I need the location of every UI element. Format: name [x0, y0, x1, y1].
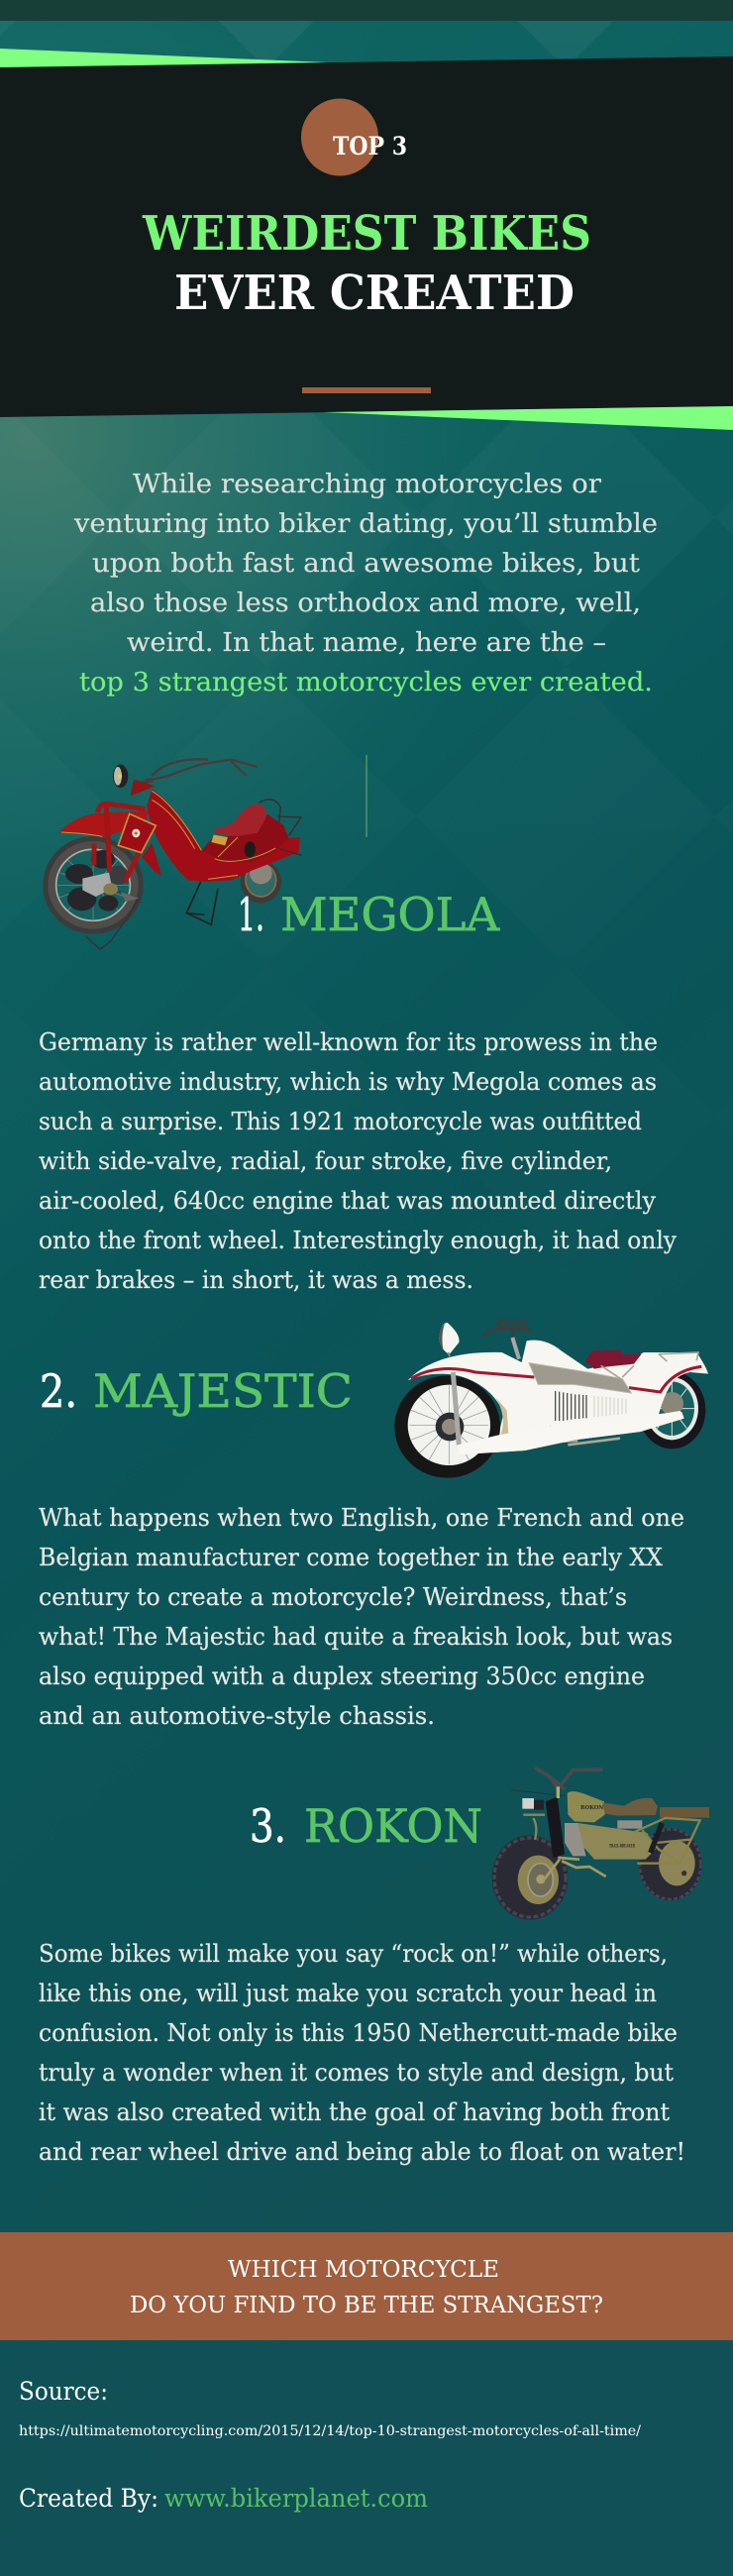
headlight: [113, 765, 128, 788]
source label: Source:: [19, 2377, 108, 2406]
text block: Rokon description: and rear wheel drive and being able to float on water!: [39, 2138, 685, 2166]
rack frame: [634, 1818, 700, 1864]
lower fin: [142, 843, 161, 876]
icon: Megola motorcycle: [43, 759, 302, 949]
rear wheel: [639, 1828, 702, 1900]
callout banner: [0, 2232, 733, 2340]
exhaust pipe: [535, 1427, 620, 1445]
gold pin stripe: [152, 791, 275, 879]
text block: Megola description: Germany is rather well-known for its prowess in the: [39, 1028, 658, 1056]
front suspension: [543, 1858, 606, 1880]
icon: Rokon motorcycle: [492, 1768, 709, 1920]
front wheel: [492, 1835, 568, 1920]
camo rack: [660, 1807, 709, 1818]
text block: Megola description: such a surprise. This 1921 motorcycle was outfitted: [39, 1108, 642, 1135]
front wheel: [43, 836, 144, 934]
background: teal gradient with diamond pattern: [0, 21, 733, 1064]
intro text: also those less orthodox and more, well,: [90, 589, 641, 618]
credit line: Created By:: [19, 2484, 158, 2513]
handlebars: [132, 759, 258, 793]
text block: Megola description: rear brakes – in short, it was a mess.: [39, 1266, 473, 1294]
text block: Rokon description: Some bikes will make you say “rock on!” while others,: [39, 1940, 668, 1968]
engine: [65, 850, 140, 949]
front fork: [453, 1372, 459, 1445]
vents: [556, 1391, 586, 1421]
credit line: [19, 2484, 428, 2513]
text block: Rokon description: it was also created with the goal of having both front: [39, 2098, 670, 2126]
text block: Rokon description: [39, 1940, 685, 2166]
engine: [565, 1823, 586, 1856]
green accent: top left wedge: [0, 49, 327, 67]
headlight: [439, 1323, 460, 1354]
lower frame: [458, 1412, 684, 1454]
heading: 2. Majestic: MAJESTIC: [93, 1364, 353, 1418]
text block: Megola description: air-cooled, 640cc engine that was mounted directly: [39, 1187, 656, 1215]
camo seat: [602, 1798, 658, 1816]
badge label: TOP 3: [333, 132, 407, 161]
seat: [585, 1350, 642, 1369]
text block: Rokon description: truly a wonder when it comes to style and design, but: [39, 2059, 674, 2087]
front fender: [58, 810, 149, 837]
heading: 1. Megola: MEGOLA: [280, 888, 500, 941]
badge circle: [301, 99, 378, 176]
handlebars: [482, 1322, 532, 1357]
text block: Rokon description: confusion. Not only is this 1950 Nethercutt-made bike: [39, 2019, 678, 2047]
icon: Rokon motorcycle: TRAIL-BREAKER: [609, 1844, 635, 1850]
stand: [186, 882, 218, 924]
icon: Majestic motorcycle: [394, 1322, 708, 1478]
front wheel: [394, 1375, 500, 1478]
seat back rail: [260, 800, 302, 855]
red stripe: [411, 1366, 701, 1392]
text block: Majestic description: Belgian manufacturer come together in the early XX: [39, 1544, 663, 1571]
intro text: upon both fast and awesome bikes, but: [92, 549, 641, 579]
seat struts: [601, 1352, 698, 1379]
heading: 1. Megola: 1.: [238, 888, 264, 941]
text block: Majestic description: [39, 1504, 684, 1730]
title line 2: EVER CREATED: [174, 266, 575, 321]
top dark band: [0, 0, 733, 21]
header panel: [0, 49, 733, 430]
thin vertical divider: [366, 755, 367, 837]
callout banner: DO YOU FIND TO BE THE STRANGEST?: [130, 2293, 603, 2318]
title line 1: WEIRDEST BIKES: [142, 206, 591, 262]
bike body: [147, 790, 300, 882]
text block: Megola description: automotive industry, which is why Megola comes as: [39, 1068, 657, 1096]
body: [408, 1341, 708, 1454]
headlight: [522, 1798, 534, 1809]
text block: Rokon description: like this one, will just make you scratch your head in: [39, 1980, 657, 2007]
intro text: weird. In that name, here are the –: [127, 628, 606, 658]
rear wheel: [241, 860, 281, 904]
seat: [215, 805, 266, 836]
heading: 3. Rokon: 3.: [250, 1799, 286, 1853]
intro text: While researching motorcycles or: [133, 470, 602, 499]
fuel tank: [568, 1791, 605, 1822]
green accent: bottom right wedge: [323, 406, 733, 430]
header underline: [302, 387, 431, 393]
intro text: top 3 strangest motorcycles ever created.: [79, 668, 653, 698]
gold plate: [211, 835, 228, 845]
credit line: www.bikerplanet.com: [164, 2484, 428, 2513]
mesh grille: [529, 1363, 631, 1393]
intro text: [73, 470, 658, 698]
side panel: [118, 813, 156, 853]
text block: Megola description: with side-valve, radial, four stroke, five cylinder,: [39, 1147, 612, 1175]
callout banner: WHICH MOTORCYCLE: [228, 2257, 499, 2283]
fork: [94, 804, 146, 882]
rear rack brace: [511, 1790, 565, 1796]
text block: Majestic description: and an automotive-style chassis.: [39, 1702, 435, 1730]
handlebars: [535, 1768, 602, 1789]
icon: Rokon motorcycle: ROKON: [580, 1805, 603, 1811]
text block: Megola description: onto the front wheel. Interestingly enough, it had only: [39, 1227, 677, 1254]
exhaust port: [245, 841, 256, 857]
heading: 3. Rokon: ROKON: [304, 1799, 482, 1853]
front fender overlap: [495, 1397, 508, 1437]
source url: https://ultimatemotorcycling.com/2015/12/14/top-10-strangest-motorcycles-of-all-time/: [19, 2423, 641, 2439]
text block: Megola description: [39, 1028, 677, 1294]
fork guard: [546, 1796, 565, 1858]
text block: Majestic description: what! The Majestic had quite a freakish look, but was: [39, 1623, 673, 1651]
heading: 2. Majestic: 2.: [40, 1364, 77, 1418]
intro text: venturing into biker dating, you’ll stumble: [73, 509, 658, 539]
text block: Majestic description: also equipped with a duplex steering 350cc engine: [39, 1663, 645, 1690]
frame tray: [577, 1823, 656, 1860]
text block: Majestic description: century to create a motorcycle? Weirdness, that’s: [39, 1583, 627, 1611]
rear wheel: [638, 1371, 705, 1449]
text block: Majestic description: What happens when two English, one French and one: [39, 1504, 684, 1532]
